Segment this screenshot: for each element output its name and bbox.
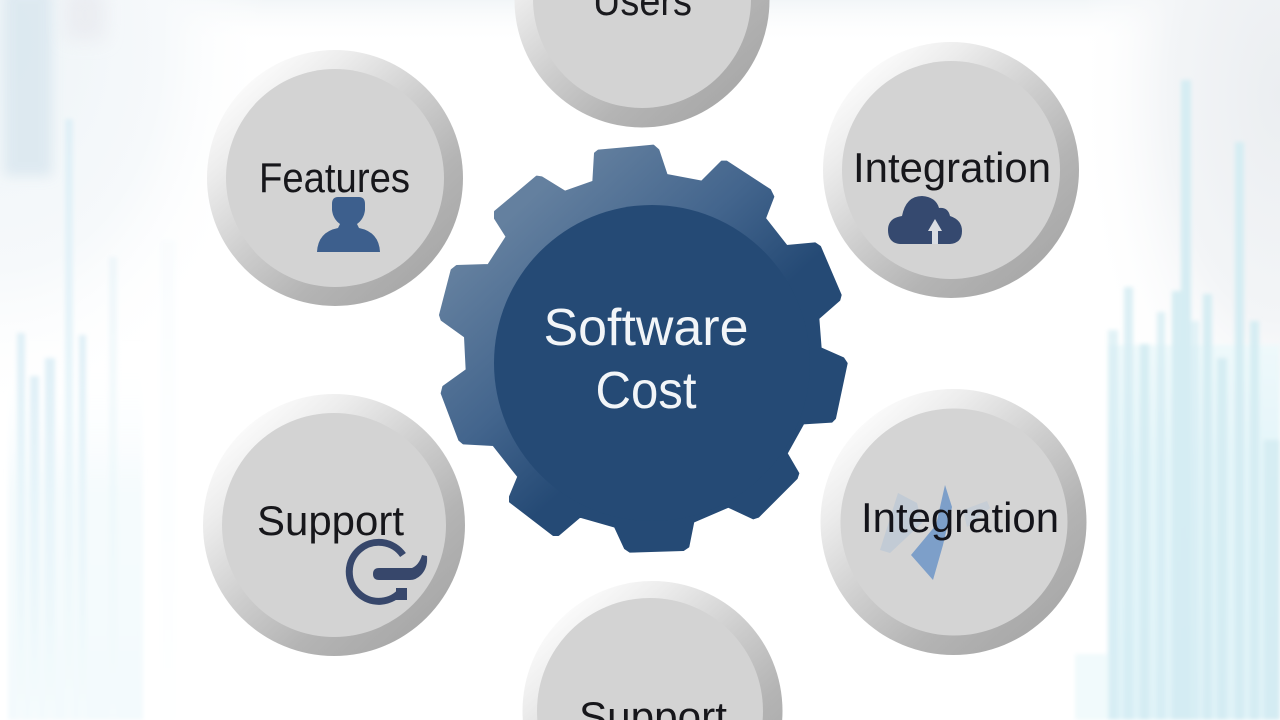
node: Features — [207, 50, 463, 306]
label: Software Cost: Cost — [596, 362, 697, 420]
icon: person — [317, 197, 380, 252]
background bars: left — [8, 119, 176, 720]
node: Support bottom — [522, 581, 782, 720]
central gear — [440, 146, 847, 552]
icon: butterfly shape — [880, 485, 990, 580]
node: Integration top — [823, 42, 1079, 298]
label: Software Cost: Software — [544, 299, 748, 357]
node: Support left — [203, 394, 465, 656]
label: Support: Support — [257, 497, 404, 544]
background bars: right — [1075, 80, 1280, 720]
label: Integration: Integration — [853, 144, 1051, 191]
label: Software Cost — [544, 299, 748, 420]
label: Integration: Integration — [861, 494, 1059, 541]
icon: refresh arrow — [349, 542, 427, 601]
node: Integration bottom — [820, 389, 1086, 655]
gear body — [440, 146, 847, 552]
label: Features: Features — [259, 154, 410, 201]
icon: cloud upload — [888, 196, 962, 244]
gear inner disk — [494, 205, 810, 521]
node: Users — [514, 0, 770, 128]
